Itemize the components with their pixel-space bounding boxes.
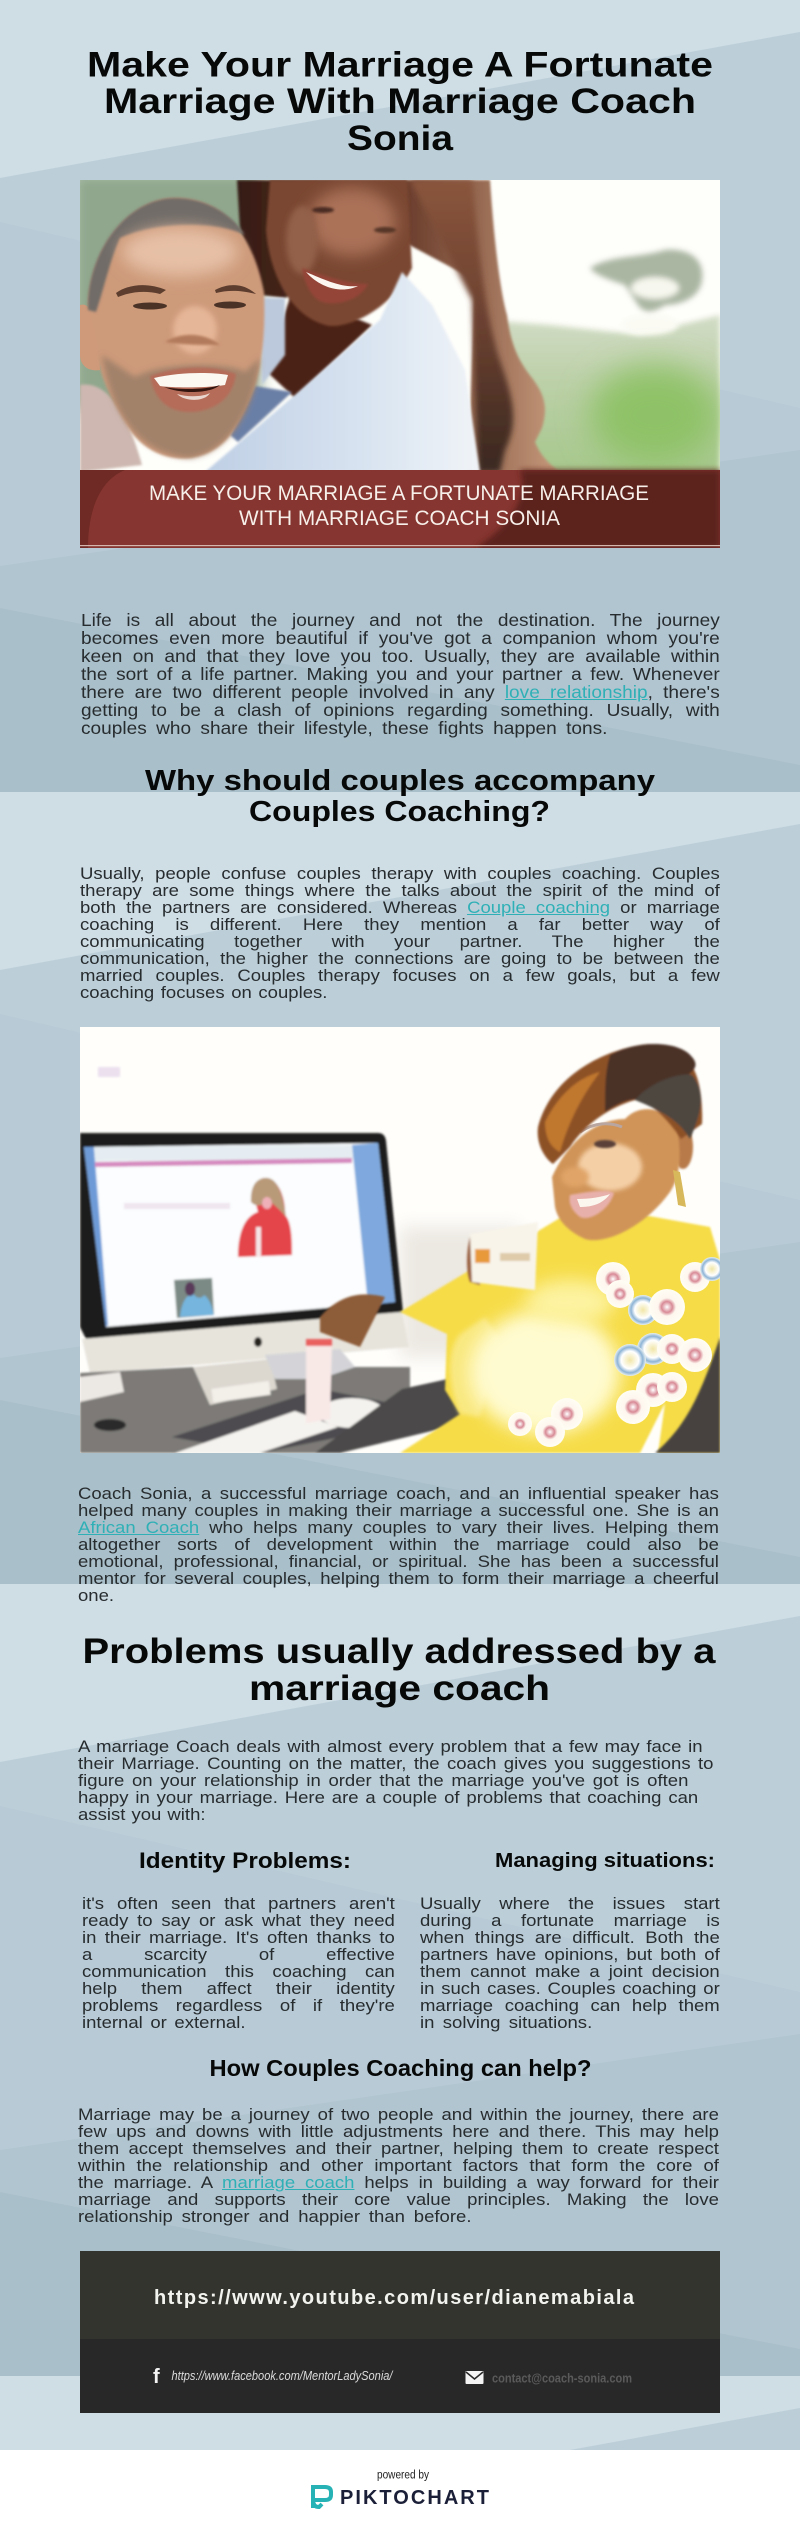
heading: problems addressed: Problems usually addressed by a — [82, 1632, 716, 1671]
paragraph: journey intro: becomes even more beautiful if you've got a companion whom you're — [81, 628, 720, 648]
paragraph: how coaching helps — [78, 2105, 719, 2226]
paragraph: therapy versus coaching: communicating together with your partner. The higher the — [80, 932, 720, 951]
paragraph: what a marriage coach deals with: figure on your relationship in order that the marriage you've got is often — [78, 1771, 688, 1790]
heading: managing situations: Managing situations: — [495, 1849, 715, 1872]
paragraph: journey intro: couples who share their lifestyle, these fights happen tons. — [81, 718, 607, 738]
paragraph: how coaching helps: marriage and supports their core value principles. Making the love — [78, 2190, 719, 2209]
banner: MAKE YOUR MARRIAGE A FORTUNATE MARRIAGE — [149, 482, 649, 505]
paragraph: how coaching helps: them accept themselves and their partner, helping them to create respect — [78, 2139, 719, 2158]
text column: identity problems: communication this coaching can — [82, 1962, 394, 1981]
footer: powered by Piktochart — [311, 2470, 489, 2509]
paragraph: what a marriage coach deals with: happy in your marriage. Here are a couple of problems that coaching can — [78, 1788, 698, 1807]
text column: identity problems: problems regardless of if they're — [82, 1996, 394, 2015]
paragraph: therapy versus coaching: communication, the higher the connections are going to be between the — [80, 949, 720, 968]
man: head — [80, 305, 100, 370]
icon: facebook: f — [153, 2366, 160, 2388]
monitor — [80, 1133, 409, 1374]
paragraph: therapy versus coaching: coaching is different. Here they mention a far better way of — [80, 915, 720, 934]
heading: why couples coaching — [145, 765, 655, 828]
woman: neck and face — [265, 292, 372, 398]
paragraph: about Coach Sonia: African Coach who helps many couples to vary their lives. Helping them — [78, 1518, 719, 1537]
paragraph: journey intro: there are two different people involved in any love relationship, there's — [81, 682, 720, 702]
paragraph: what a marriage coach deals with: their Marriage. Counting on the matter, the coach gives you suggestions to — [78, 1754, 713, 1773]
icon: piktochart logo — [313, 2487, 331, 2508]
paragraph: journey intro — [81, 610, 720, 738]
icon: mail — [466, 2371, 484, 2384]
text column: identity problems: it's often seen that partners aren't — [82, 1894, 394, 1913]
text column: managing situations: Usually where the issues start — [420, 1894, 720, 1913]
paragraph: about Coach Sonia: altogether sorts of development within the marriage could also be — [78, 1535, 719, 1554]
heading: why couples coaching: Why should couples accompany — [145, 765, 655, 797]
blouse flowers — [508, 1257, 724, 1447]
text column: managing situations: them cannot make a joint decision — [420, 1962, 720, 1981]
title: Sonia — [347, 119, 454, 158]
banner: WITH MARRIAGE COACH SONIA — [239, 507, 560, 530]
text column: managing situations: when things are difficult. Both the — [420, 1928, 720, 1947]
woman: hair — [237, 180, 560, 472]
paragraph: about Coach Sonia: emotional, professional, financial, or spiritual. She has been a successful — [78, 1552, 719, 1571]
paragraph: journey intro: Life is all about the journey and not the destination. The journey — [81, 610, 720, 630]
photo: smiling couple with banner — [80, 180, 720, 548]
paragraph: about Coach Sonia: helped many couples in making their marriage a successful one. She is an — [78, 1501, 719, 1520]
text column: managing situations: partners have opinions, but both of — [420, 1945, 720, 1964]
woman: ear and face — [552, 1109, 693, 1240]
paragraph: therapy versus coaching: married couples. Couples therapy focuses on a few goals, but a few — [80, 966, 720, 985]
paragraph: about Coach Sonia: one. — [78, 1586, 114, 1605]
woman: hair — [538, 1044, 702, 1164]
text column: managing situations: marriage coaching can help them — [420, 1996, 720, 2015]
youtube link: https://www.youtube.com/user/dianemabiala — [154, 2287, 635, 2309]
paragraph: how coaching helps: Marriage may be a journey of two people and within the journey, there are — [78, 2105, 719, 2124]
title: Make Your Marriage A Fortunate — [87, 46, 713, 84]
paragraph: therapy versus coaching: therapy are some things where the talks about the spirit of the mind of — [80, 881, 720, 900]
heading: why couples coaching: Couples Coaching? — [249, 796, 550, 828]
facebook link: https://www.facebook.com/MentorLadySonia/ — [172, 2368, 394, 2383]
contact email: contact@coach-sonia.com — [492, 2370, 632, 2386]
footer: powered by Piktochart: PIKTOCHART — [340, 2487, 489, 2509]
paragraph: therapy versus coaching: Usually, people confuse couples therapy with couples coaching. Couples — [80, 864, 720, 883]
text column: managing situations: in solving situations. — [420, 2013, 592, 2032]
footer: powered by Piktochart: powered by — [377, 2470, 429, 2482]
text column: managing situations: during a fortunate marriage is — [420, 1911, 720, 1930]
paragraph: therapy versus coaching — [80, 864, 720, 1002]
photo: coach Sonia at desk with mug — [80, 1027, 720, 1453]
text column: managing situations: in such cases. Couples coaching or — [420, 1979, 720, 1998]
man: shoulder and collar — [80, 385, 142, 472]
desk and accessories — [80, 1339, 490, 1453]
text column: identity problems: a scarcity of effective — [82, 1945, 394, 1964]
text column: identity problems: ready to say or ask what they need — [82, 1911, 394, 1930]
paragraph: about Coach Sonia — [78, 1484, 719, 1605]
paragraph: therapy versus coaching: coaching focuses on couples. — [80, 983, 327, 1002]
paragraph: how coaching helps: within the relationship and other important factors that form the core of — [78, 2156, 719, 2175]
heading: problems addressed: marriage coach — [249, 1669, 550, 1708]
heading: problems addressed — [82, 1632, 716, 1708]
woman: sweater — [260, 298, 285, 385]
title: Marriage With Marriage Coach — [104, 82, 696, 121]
text column: identity problems: internal or external. — [82, 2013, 245, 2032]
heading: how coaching can help: How Couples Coaching can help? — [210, 2055, 592, 2081]
paragraph: how coaching helps: the marriage. A marriage coach helps in building a way forward for their — [78, 2173, 719, 2192]
contact panel — [80, 2251, 720, 2413]
paragraph: journey intro: the sort of a life partner. Making you and your partner a few. Whenever — [81, 664, 720, 684]
paragraph: journey intro: keen on and that they love you too. Usually, they are available within — [81, 646, 720, 666]
paragraph: journey intro: getting to be a clash of opinions regarding something. Usually, with — [81, 700, 720, 720]
text column: managing situations — [420, 1894, 720, 2032]
paragraph: about Coach Sonia: Coach Sonia, a successful marriage coach, and an influential speaker has — [78, 1484, 719, 1503]
paragraph: how coaching helps: relationship stronger and happier than before. — [78, 2207, 471, 2226]
paragraph: about Coach Sonia: mentor for several couples, helping them to form their marriage a cheerful — [78, 1569, 719, 1588]
paragraph: what a marriage coach deals with — [78, 1737, 713, 1824]
text column: identity problems: in their marriage. It's often thanks to — [82, 1928, 394, 1947]
text column: identity problems — [82, 1894, 395, 2032]
paragraph: therapy versus coaching: both the partners are considered. Whereas Couple coaching or marriage — [80, 898, 720, 917]
paragraph: how coaching helps: few ups and downs with little adjustments here and there. This may help — [78, 2122, 719, 2141]
heading: identity problems: Identity Problems: — [139, 1848, 351, 1873]
text column: identity problems: help them affect their identity — [82, 1979, 394, 1998]
woman: arm and blouse — [320, 1294, 385, 1347]
paragraph: what a marriage coach deals with: A marriage Coach deals with almost every problem that a few may face in — [78, 1737, 703, 1756]
banner — [80, 470, 720, 548]
mug — [467, 1222, 538, 1290]
paragraph: what a marriage coach deals with: assist you with: — [78, 1805, 206, 1824]
title — [87, 46, 713, 158]
